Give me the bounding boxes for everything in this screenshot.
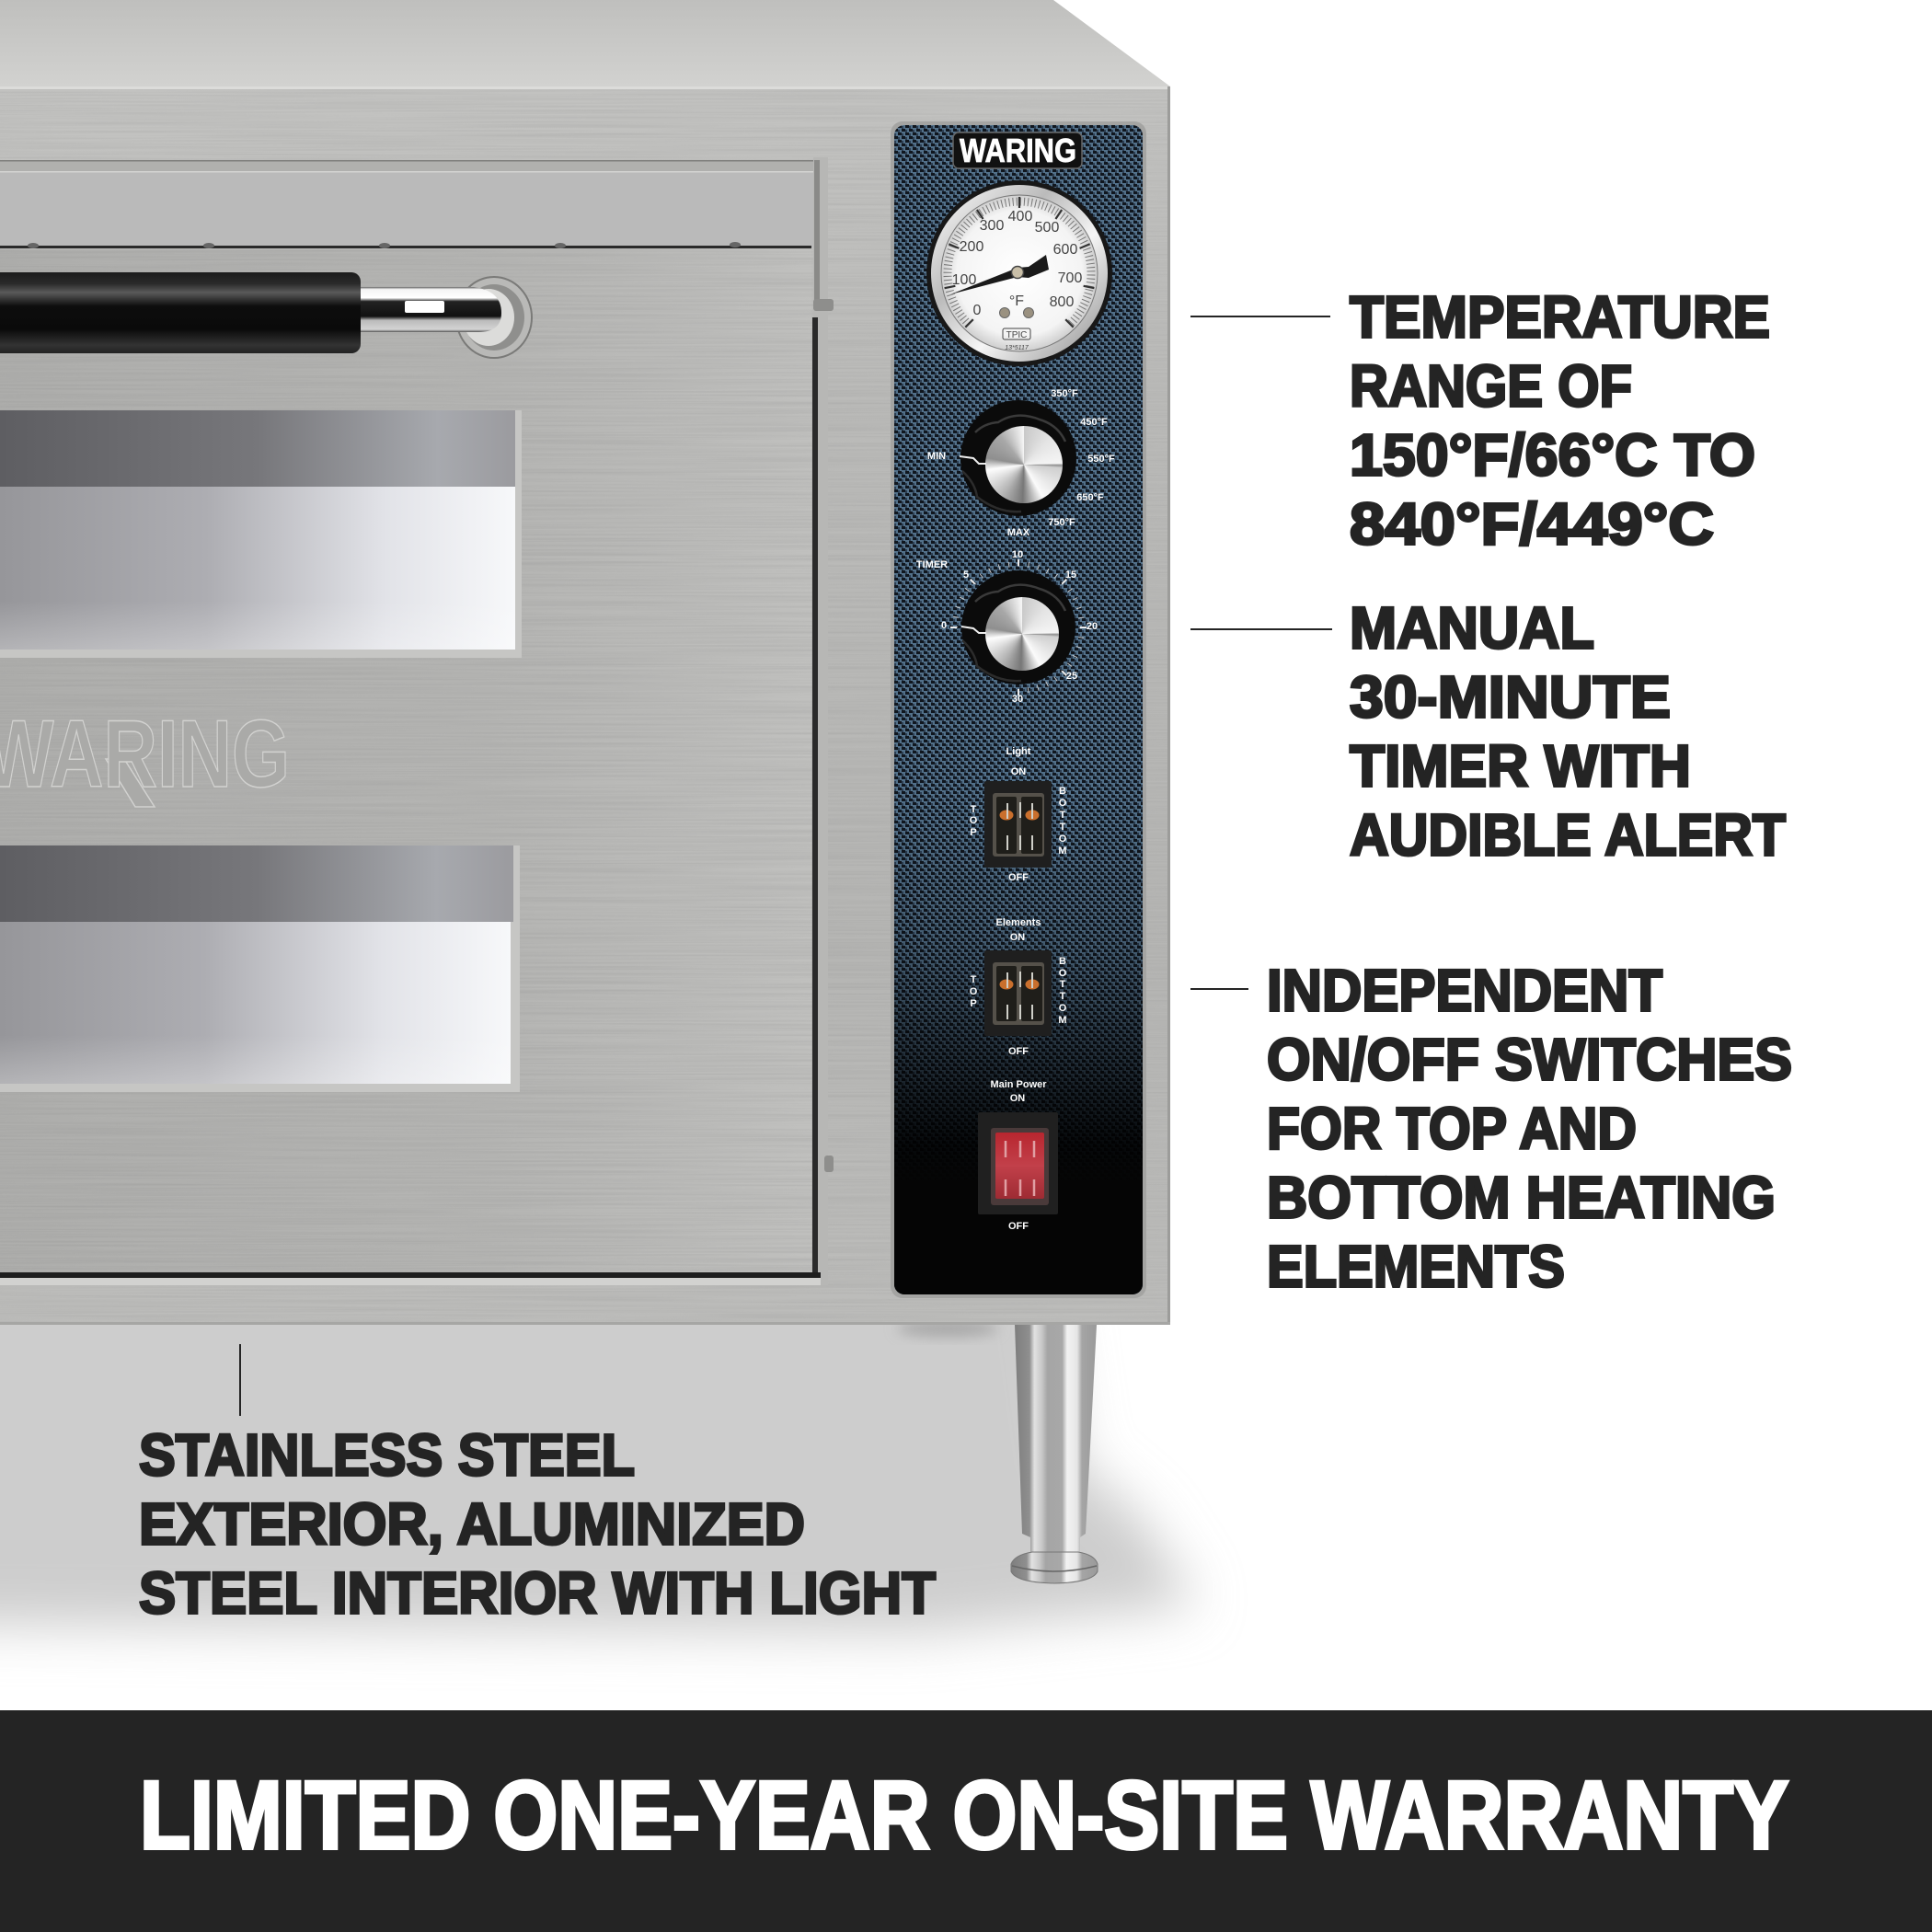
elements switch: T <box>971 974 977 985</box>
temperature knob <box>927 388 1115 538</box>
light switch: P <box>970 827 977 838</box>
callout: timer: AUDIBLE ALERT <box>1350 802 1786 868</box>
light switch: O <box>1059 834 1067 845</box>
door lintel <box>0 160 813 247</box>
panel frame <box>891 121 1146 1298</box>
temperature gauge: 700 <box>1058 270 1082 286</box>
oven top surface <box>0 0 1170 86</box>
timer knob: 10 <box>1012 549 1023 560</box>
light switch: T <box>1060 810 1066 821</box>
door panel <box>0 249 811 1273</box>
elements switch: O <box>970 986 978 997</box>
elements switch: T <box>1060 979 1066 990</box>
light switch: T <box>1060 822 1066 833</box>
timer knob: 15 <box>1065 569 1076 581</box>
gauge needle <box>950 255 1049 294</box>
light switch: T <box>971 804 977 815</box>
warranty banner <box>0 1710 1932 1932</box>
callout: exterior: STAINLESS STEEL <box>139 1422 635 1489</box>
callout: temperature range: TEMPERATURE <box>1350 283 1770 350</box>
light switch: ON <box>1011 766 1026 777</box>
main power switch: ON <box>1010 1093 1025 1104</box>
callout: timer: TIMER WITH <box>1350 732 1691 799</box>
temperature gauge: 0 <box>973 303 982 318</box>
oven front face <box>0 86 1170 1325</box>
black grip <box>0 272 361 353</box>
timer knob: 30 <box>1012 694 1023 705</box>
elements switch: M <box>1058 1015 1067 1026</box>
elements switch: T <box>1060 991 1066 1002</box>
timer knob: TIMER <box>916 559 948 570</box>
light switch: OFF <box>1008 872 1029 883</box>
light switch: O <box>970 815 978 826</box>
callout: temperature range: 150°F/66°C TO <box>1350 421 1755 488</box>
temperature gauge: 400 <box>1008 209 1032 224</box>
callout leader: switches <box>1190 988 1248 990</box>
light switch: M <box>1058 845 1067 857</box>
timer knob: 5 <box>963 569 969 581</box>
callout leader: timer <box>1190 628 1332 630</box>
temperature gauge: 13*5117 <box>1005 345 1029 351</box>
oven door <box>0 157 834 1285</box>
callout: switches: ON/OFF SWITCHES <box>1267 1027 1792 1093</box>
temperature gauge: 800 <box>1050 294 1074 310</box>
callout: switches: ELEMENTS <box>1267 1233 1565 1299</box>
temperature knob: 350°F <box>1051 388 1078 399</box>
floor shadow <box>0 1196 1196 1633</box>
control panel <box>891 121 1146 1298</box>
light switch <box>970 746 1067 883</box>
temperature gauge: TPIC <box>1006 330 1027 340</box>
main power switch: Main Power <box>990 1079 1047 1090</box>
callout: exterior: EXTERIOR, ALUMINIZED <box>139 1490 805 1557</box>
light switch: O <box>1059 798 1067 809</box>
temperature gauge: °F <box>1009 293 1024 309</box>
light switch: B <box>1059 786 1066 797</box>
callout: switches: FOR TOP AND <box>1267 1095 1637 1161</box>
main power switch: OFF <box>1008 1221 1029 1232</box>
door top seam <box>0 246 811 248</box>
temperature knob: MIN <box>927 451 946 462</box>
callout: exterior <box>139 1422 936 1627</box>
callout: timer: MANUAL <box>1350 594 1594 661</box>
elements switch: Elements <box>996 917 1041 928</box>
hinge bottom <box>824 1156 834 1172</box>
timer knob <box>916 549 1098 705</box>
temperature gauge: 100 <box>952 272 976 288</box>
main power switch <box>978 1079 1058 1232</box>
elements switch: O <box>1059 968 1067 979</box>
lower door window <box>0 845 520 1092</box>
callout: timer <box>1350 594 1786 868</box>
callout: exterior: STEEL INTERIOR WITH LIGHT <box>139 1560 936 1627</box>
temperature knob: MAX <box>1007 527 1030 538</box>
callout: timer: 30-MINUTE <box>1350 664 1671 730</box>
elements switch: ON <box>1010 932 1025 943</box>
temperature knob: 450°F <box>1080 417 1108 428</box>
timer knob: 20 <box>1087 621 1098 632</box>
elements switch <box>970 917 1067 1057</box>
oven leg <box>1011 1325 1098 1583</box>
elements switch: B <box>1059 956 1066 967</box>
temperature knob: 750°F <box>1048 517 1075 528</box>
callout: switches <box>1267 957 1792 1299</box>
timer knob: 25 <box>1066 671 1077 682</box>
temperature gauge: 300 <box>980 218 1004 234</box>
elements switch: P <box>970 998 977 1009</box>
temperature gauge: 500 <box>1035 220 1059 236</box>
upper door window <box>0 410 522 658</box>
timer knob: 0 <box>941 620 947 631</box>
callout: temperature range <box>1350 283 1770 558</box>
elements switch: O <box>1059 1003 1067 1014</box>
hinge top <box>813 299 834 311</box>
callout leader: temperature <box>1190 316 1330 317</box>
callout: temperature range: 840°F/449°C <box>1350 491 1714 558</box>
temperature gauge <box>926 180 1112 366</box>
callout: temperature range: RANGE OF <box>1350 353 1632 420</box>
temperature gauge: 200 <box>960 239 983 255</box>
callout: switches: INDEPENDENT <box>1267 957 1662 1023</box>
temperature knob: 550°F <box>1087 454 1115 465</box>
door bottom seam <box>0 1272 821 1278</box>
brand badge: WARING <box>960 132 1076 169</box>
oven body <box>0 0 1170 1325</box>
callout leader: exterior <box>239 1344 241 1416</box>
callout: switches: BOTTOM HEATING <box>1267 1165 1776 1231</box>
temperature knob: 650°F <box>1076 492 1104 503</box>
handle mount <box>456 277 532 358</box>
temperature gauge: 600 <box>1053 242 1077 258</box>
light switch: Light <box>1006 746 1031 757</box>
chrome rod <box>354 287 501 332</box>
elements switch: OFF <box>1008 1046 1029 1057</box>
door handle <box>0 272 532 358</box>
